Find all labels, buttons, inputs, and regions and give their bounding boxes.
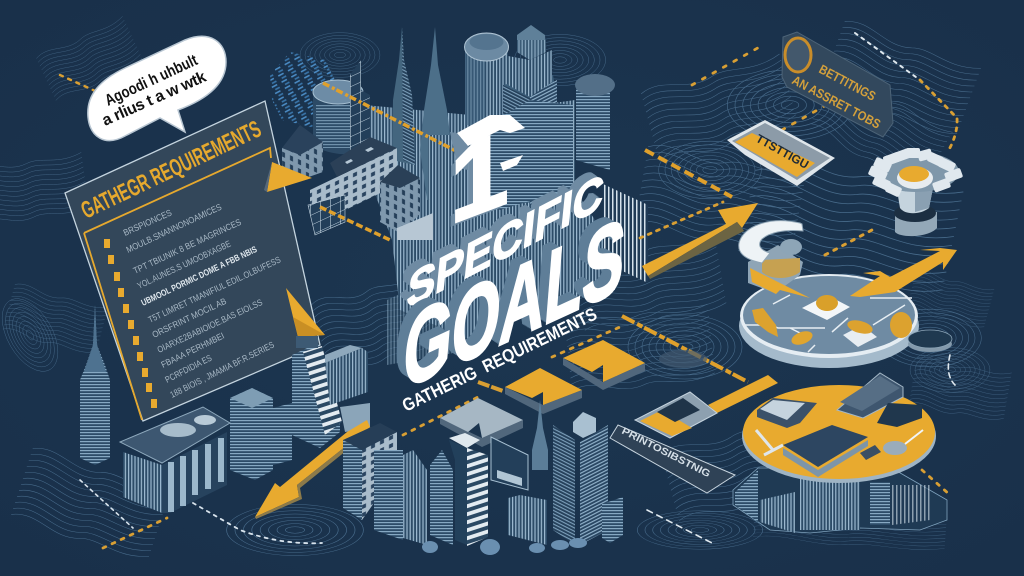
skyline: upper city	[282, 25, 648, 365]
checklist text: ORSFRINT MOCIL AB	[151, 296, 228, 340]
checklist text: UBMOOL PORMIC DOME A FBB NBIS	[140, 244, 258, 308]
tower: tapered spire	[80, 305, 110, 465]
checklist text	[122, 202, 282, 400]
tower: round left	[313, 80, 363, 154]
tower g	[508, 495, 547, 545]
arrow: panel lower	[286, 288, 325, 337]
checklist text: OIARXE2BABIOIOE.BAS EIOLSS	[156, 297, 264, 355]
frame building	[491, 437, 528, 490]
tile: yellow right	[563, 340, 645, 390]
item: spoon	[883, 430, 923, 455]
speech bubble	[88, 36, 226, 141]
item: small chip	[860, 445, 881, 460]
specific: SPECIFIC	[405, 163, 606, 320]
numeral one: 1	[450, 108, 508, 247]
gold items	[752, 308, 778, 337]
small ring dish	[908, 330, 952, 352]
checklist text: 188 BIOIS , JMAMIA BF.R.SERIES	[168, 340, 276, 400]
checklist text: PCRFDIDIA ES	[163, 353, 213, 385]
building: tower j	[230, 388, 273, 480]
arrow: upper right	[850, 248, 957, 297]
small ring dish under card	[659, 350, 707, 368]
item: gadget	[757, 398, 817, 428]
goals: GOALS	[400, 195, 629, 413]
tower: stepped	[503, 25, 557, 205]
tower: right cylinder	[575, 74, 615, 170]
card text: TTSTTIGU	[754, 131, 811, 172]
tower a	[343, 423, 397, 520]
sign: assert tools	[782, 32, 893, 137]
icon: flower dial device	[868, 148, 963, 236]
needle tower	[532, 400, 548, 470]
checklist text: T5T LIMRET TMANIFIUL EDIL.OLBUFESS	[147, 254, 282, 325]
sign text: BETTITNGS	[817, 61, 879, 104]
steps: isometric tiles	[440, 340, 645, 447]
skyline: lower center	[343, 400, 623, 555]
checklist bullets	[104, 239, 157, 408]
tower h	[553, 412, 608, 545]
label text: PRINTOSIBSTNIG	[620, 426, 712, 480]
tile: grey left	[440, 398, 523, 447]
item: small stick	[756, 430, 783, 455]
icon: c-shaped loop	[739, 221, 803, 293]
checklist text: BRSPIONCES	[122, 208, 173, 238]
street trees	[422, 538, 587, 555]
blue code cloud	[270, 52, 335, 128]
icon: sign ring	[785, 38, 811, 72]
subtitle: GATHERIG REQUIREMENTS	[399, 304, 600, 416]
center tile	[802, 295, 850, 320]
dashed path: top city	[320, 83, 748, 382]
disc: yellow platform	[742, 373, 936, 483]
tower e	[449, 433, 488, 546]
heading underline	[84, 148, 271, 420]
disc: grey process platform	[739, 274, 919, 368]
speech bubble: a rlius t a w wtk	[100, 69, 209, 130]
checklist text: MOULB.SNANNONOAMICES	[125, 202, 223, 255]
tower: lower right mass	[478, 100, 573, 210]
item: dark monitor	[877, 403, 922, 427]
building: domed	[380, 165, 420, 232]
panel: gather requirements	[65, 101, 320, 421]
temple	[120, 407, 230, 513]
building: hatched behind goals	[387, 275, 470, 365]
building: vertical stripe block	[325, 345, 368, 405]
checklist text: YOL.AUNES.S UMOOBXAGBE	[136, 239, 232, 291]
arrow: panel upper	[264, 162, 312, 192]
checklist text: TPT TBIUNIK 8 BE MAGRINCES	[132, 217, 243, 276]
label bar: prioritising	[610, 425, 735, 493]
tile: yellow middle	[505, 368, 582, 414]
building: hatched behind title	[603, 184, 648, 283]
skyline: under yellow disc	[733, 468, 947, 533]
path marker	[478, 382, 503, 391]
tower i	[602, 497, 623, 543]
panel heading: GATHEGR REQUIREMENTS	[77, 116, 265, 224]
arrow: middle right	[642, 203, 758, 279]
building mass behind title	[365, 100, 615, 340]
tower c	[403, 450, 427, 545]
device: yellow connector strip	[635, 375, 778, 438]
building: small rooftop	[340, 403, 370, 432]
dotted path markers	[60, 33, 957, 548]
arrow: into disc from left	[750, 268, 810, 298]
item: keyboard box	[837, 373, 903, 418]
disc connector lines	[745, 295, 912, 352]
building: grid lower left	[308, 195, 345, 235]
tower b	[374, 450, 403, 540]
sign: assert tools: AN ASSRET TOBS	[790, 72, 883, 132]
card: yellow testing tablet	[727, 120, 835, 186]
tower: right spire	[420, 27, 467, 200]
checklist text: FBAAA PERHMBEI	[159, 331, 226, 370]
building: dark roof block	[310, 137, 397, 215]
tower: cylinder	[464, 33, 508, 125]
tower d	[430, 450, 453, 545]
tower: left spire	[392, 27, 415, 165]
building: front small	[397, 213, 433, 240]
tower: grid	[350, 60, 370, 152]
skyline: lower left	[80, 305, 370, 513]
bubble text: Agoodi h uhbult	[103, 52, 201, 110]
item: large slab	[783, 425, 868, 477]
arrow: large down left	[255, 420, 372, 519]
building: low left	[282, 125, 323, 180]
building: stepped tower	[292, 336, 342, 448]
building: tower k	[273, 403, 292, 465]
